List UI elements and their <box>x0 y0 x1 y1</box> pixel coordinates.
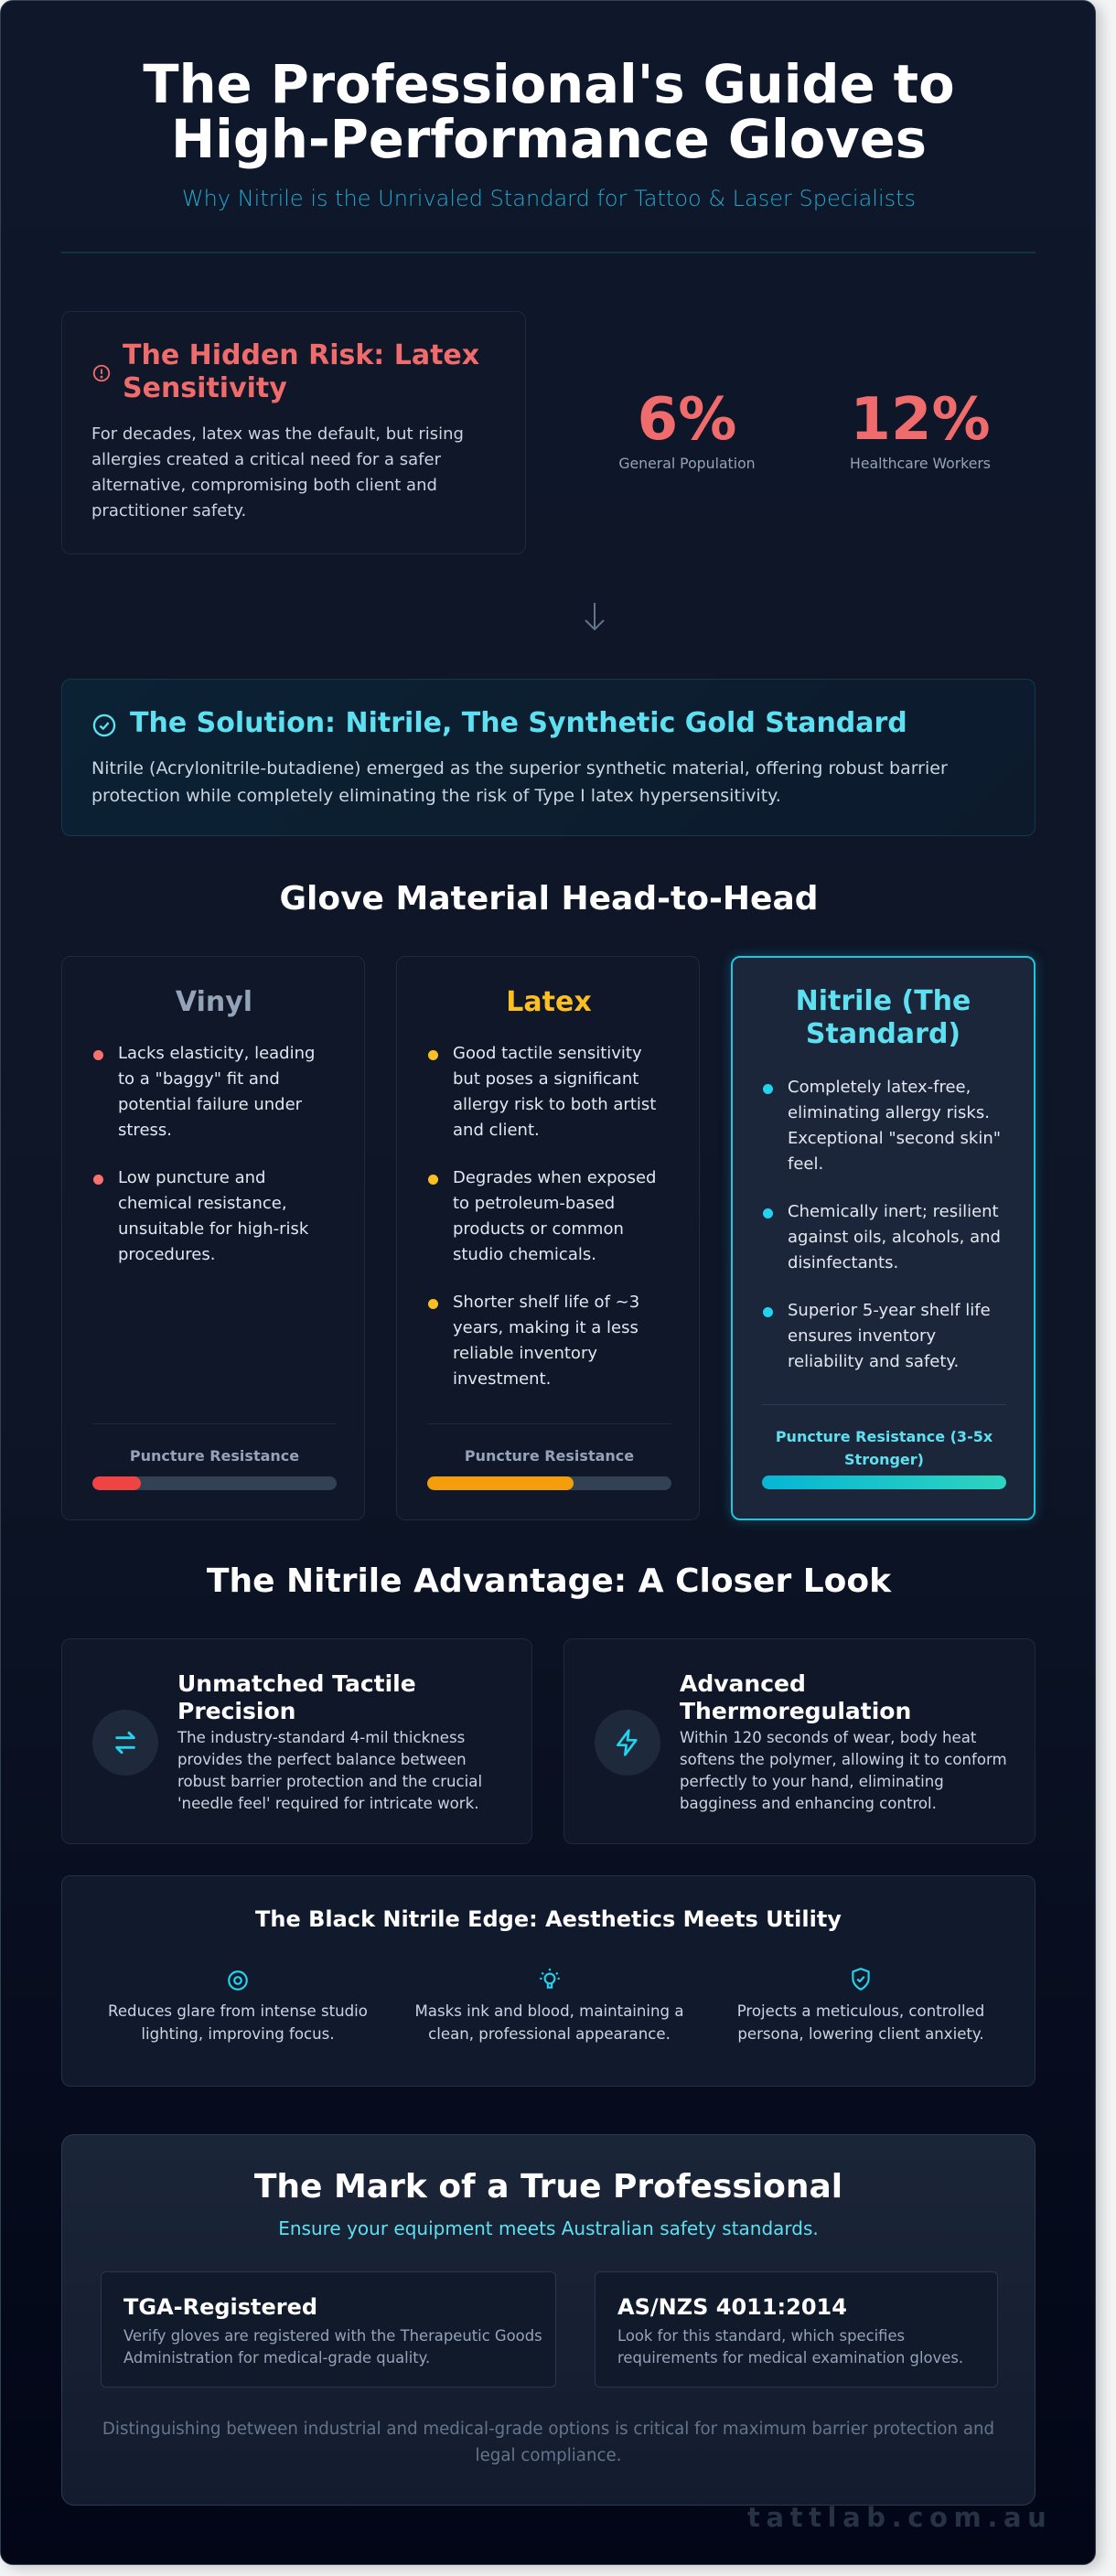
text: Within 120 seconds of wear, body heat softens the polymer, allowing it to conform perfectly to your hand, eliminating bagginess and enhancing control. <box>680 1729 1007 1812</box>
heading: The Black Nitrile Edge: Aesthetics Meets Utility <box>255 1906 842 1932</box>
stat: 6% <box>618 386 756 472</box>
icon: arrows <box>92 1710 158 1776</box>
stat: 12%: Healthcare Workers <box>850 455 991 472</box>
item: persona: Projects a meticulous, controlled persona, lowering client anxiety. <box>737 2002 984 2043</box>
box: AS/NZS: AS/NZS 4011:2014 <box>617 2294 847 2320</box>
item: masks ink: Masks ink and blood, maintaining a clean, professional appearance. <box>414 2002 684 2043</box>
box: TGA <box>101 2271 556 2388</box>
title <box>143 54 955 170</box>
box: TGA: TGA-Registered <box>123 2294 317 2320</box>
panel: solution <box>61 679 1036 836</box>
item: glare <box>91 1952 384 2060</box>
heading: head-to-head: Glove Material Head-to-Head <box>279 880 819 918</box>
bullet: Lacks elasticity, leading to a "baggy" fit and potential failure under stress. <box>118 1044 315 1140</box>
card: vinyl: Vinyl <box>176 986 252 1018</box>
box: AS/NZS: Look for this standard, which specifies requirements for medical examination gloves. <box>617 2327 963 2367</box>
bar: latex <box>427 1476 671 1490</box>
card: latex <box>396 956 700 1520</box>
bullet: Low puncture and chemical resistance, unsuitable for high-risk procedures. <box>118 1168 308 1264</box>
bar: vinyl <box>92 1476 337 1490</box>
bullet: Shorter shelf life of ~3 years, making it a less reliable inventory investment. <box>453 1293 639 1389</box>
item: glare: Reduces glare from intense studio lighting, improving focus. <box>108 2002 368 2043</box>
label: puncture: Puncture Resistance <box>465 1447 634 1465</box>
card: nitrile <box>731 956 1036 1520</box>
card: vinyl <box>61 956 365 1520</box>
stat: 12%: 12% <box>850 386 991 454</box>
watermark: tattlab.com.au <box>747 2502 1052 2533</box>
panel: black nitrile edge <box>61 1875 1036 2087</box>
heading: advantage: The Nitrile Advantage: A Closer Look <box>207 1562 891 1600</box>
text: risk body: For decades, latex was the default, but rising allergies created a critical need for a safer alternative, compromising both client and practitioner safety. <box>91 424 464 521</box>
panel: mark of professional <box>61 2134 1036 2506</box>
bullet: Completely latex-free, eliminating allergy risks. Exceptional "second skin" feel. <box>788 1078 1001 1174</box>
heading: solution: The Solution: Nitrile, The Synthetic Gold Standard <box>130 707 907 739</box>
subheading: Ensure your equipment meets Australian safety standards. <box>278 2217 819 2239</box>
bullet: Superior 5-year shelf life ensures inventory reliability and safety. <box>788 1301 991 1371</box>
heading: The Mark of a True Professional <box>254 2168 842 2206</box>
title: Advanced Thermoregulation <box>680 1670 911 1724</box>
icon: check circle <box>93 714 115 737</box>
card: latex: Latex <box>506 986 592 1018</box>
label: puncture nitrile: Puncture Resistance (3-5x Stronger) <box>776 1428 993 1468</box>
title: The Professional's Guide to <box>143 54 955 115</box>
heading: hidden risk: The Hidden Risk: Latex Sensitivity <box>123 339 479 404</box>
bullet: Good tactile sensitivity but poses a significant allergy risk to both artist and client. <box>453 1044 656 1140</box>
box: AS/NZS <box>595 2271 998 2388</box>
text: The industry-standard 4-mil thickness provides the perfect balance between robust barrier protection and the crucial 'needle feel' required for intricate work. <box>177 1729 482 1812</box>
title: Unmatched Tactile Precision <box>177 1670 416 1724</box>
panel: hidden risk <box>61 311 526 554</box>
footer note: Distinguishing between industrial and medical-grade options is critical for maximum barrier protection and legal compliance. <box>102 2420 994 2465</box>
bullet: Degrades when exposed to petroleum-based products or common studio chemicals. <box>453 1168 656 1264</box>
arrow: down <box>585 603 605 631</box>
box: TGA: Verify gloves are registered with the Therapeutic Goods Administration for medical-grade quality. <box>123 2327 542 2367</box>
label: puncture: Puncture Resistance <box>130 1447 299 1465</box>
stat: 6%: 6% <box>638 386 736 454</box>
panel: tactile precision <box>61 1638 532 1844</box>
item: masks ink <box>405 1952 693 2060</box>
text: solution body: Nitrile (Acrylonitrile-butadiene) emerged as the superior synthetic material, offering robust barrier protection while completely eliminating the risk of Type I latex hypersensitivity. <box>91 758 948 806</box>
icon: alert <box>93 364 110 382</box>
bar: nitrile <box>762 1476 1006 1489</box>
bullet: Chemically inert; resilient against oils, alcohols, and disinfectants. <box>788 1202 1001 1272</box>
card: nitrile: Standard) <box>806 1018 960 1050</box>
stat: 6%: General Population <box>618 455 756 472</box>
title: High-Performance Gloves <box>171 109 927 170</box>
item: persona <box>714 1952 1007 2060</box>
card: nitrile: Nitrile (The <box>796 985 971 1017</box>
icon: bolt <box>595 1710 660 1776</box>
subtitle: Why Nitrile is the Unrivaled Standard for Tattoo & Laser Specialists <box>182 186 916 211</box>
panel: thermoregulation <box>563 1638 1036 1844</box>
